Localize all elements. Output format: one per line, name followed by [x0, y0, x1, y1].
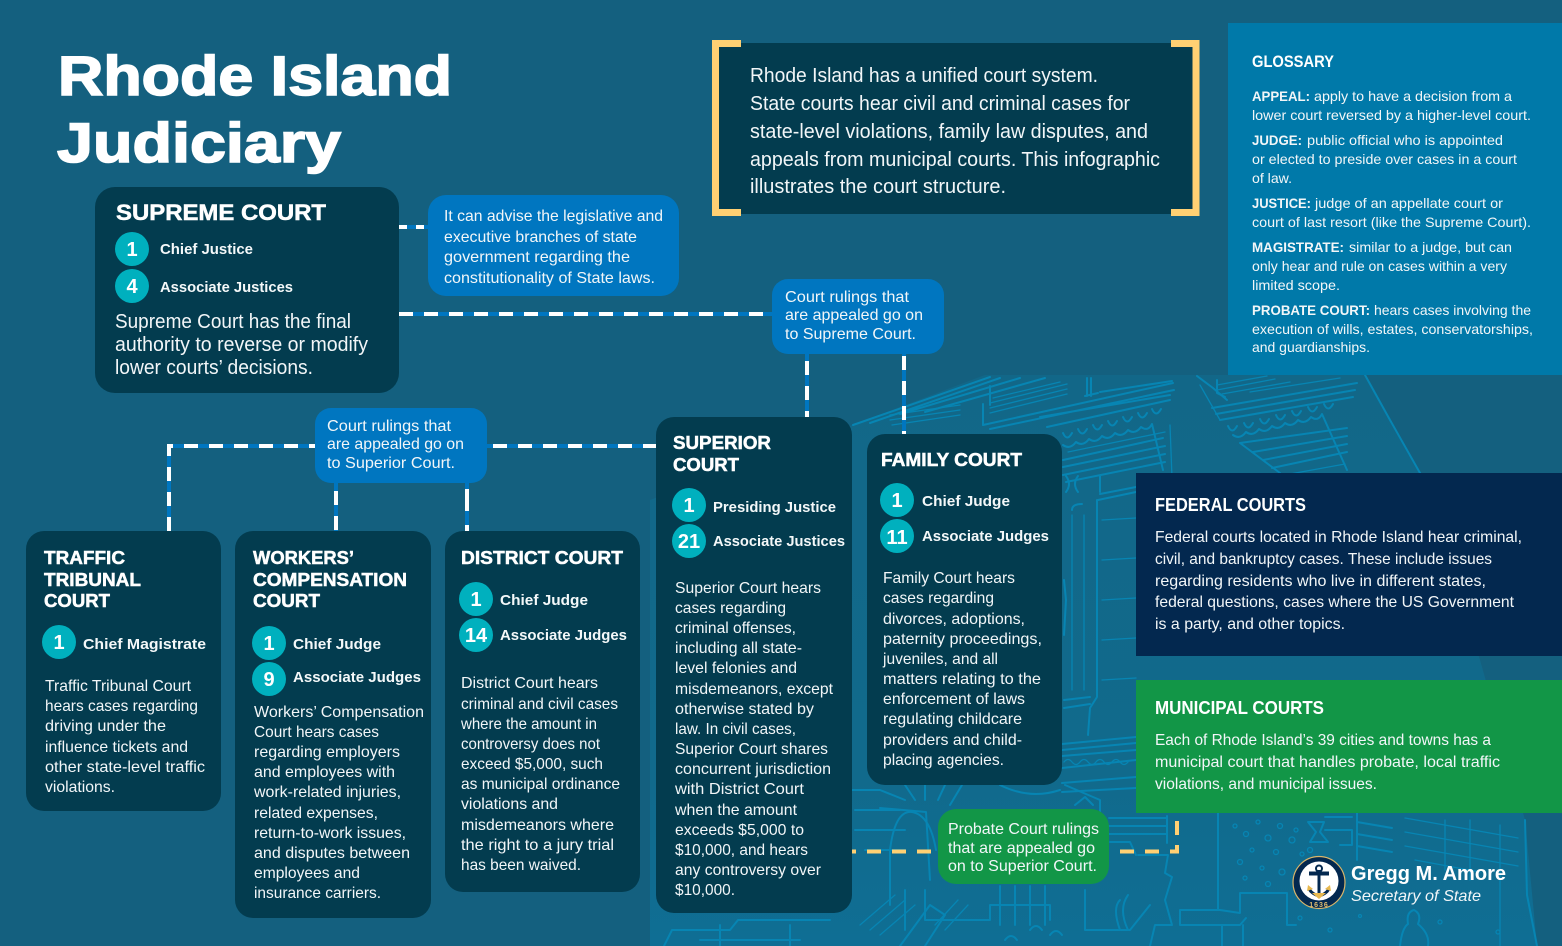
- glossary: magistrate: MAGISTRATE:: [1252, 239, 1344, 255]
- traffic tribunal description: other state-level traffic: [45, 759, 205, 776]
- badge: 1 chief judge: 1: [891, 490, 903, 512]
- workers' compensation description: related expenses,: [254, 805, 378, 822]
- callout: probate appeals: Probate Court rulings: [948, 821, 1099, 838]
- federal courts description: regarding residents who live in different states,: [1155, 573, 1486, 590]
- heading: glossary: GLOSSARY: [1252, 52, 1335, 71]
- heading: family court: FAMILY COURT: [881, 450, 1022, 470]
- workers' compensation description: and employees with: [254, 764, 395, 781]
- connector: appeals to supreme court: [399, 314, 904, 434]
- callout: appeals go to superior court: [315, 408, 487, 483]
- badge: 1 chief judge: 1: [470, 589, 482, 611]
- callout: appeals go to superior court: are appealed go on: [327, 436, 464, 453]
- badge: 1 chief judge: [880, 483, 1010, 517]
- badge: 11 associate judges: 11: [886, 527, 908, 549]
- badge: 1 chief magistrate: 1: [53, 632, 65, 654]
- district court description: exceed $5,000, such: [461, 756, 603, 773]
- connector: appeals to superior court: [169, 446, 656, 531]
- badge: 1 chief justice: [115, 232, 253, 266]
- superior court description: cases regarding: [675, 600, 786, 617]
- badge: 1 chief judge: Chief Judge: [293, 636, 381, 653]
- glossary: justice: judge of an appellate court or: [1314, 195, 1503, 211]
- title: Judiciary: [57, 111, 341, 174]
- glossary: probate court: [1252, 302, 1533, 355]
- heading: district court: DISTRICT COURT: [461, 548, 623, 568]
- district court description: misdemeanors where: [461, 817, 614, 834]
- badge: 1 presiding justice: 1: [683, 495, 695, 517]
- badge: 9 associate judges: Associate Judges: [293, 669, 421, 686]
- panel: traffic tribunal court: [26, 531, 221, 811]
- icon: state seal anchor: [1293, 856, 1345, 909]
- supreme court description: Supreme Court has the final: [115, 311, 351, 333]
- panel: glossary: [1228, 23, 1562, 375]
- badge: 1 chief magistrate: Chief Magistrate: [83, 636, 206, 653]
- traffic tribunal description: [45, 678, 205, 796]
- glossary: appeal: apply to have a decision from a: [1314, 88, 1512, 104]
- workers' compensation description: insurance carriers.: [254, 885, 381, 902]
- superior court description: criminal offenses,: [675, 620, 796, 637]
- badge: 14 associate judges: 14: [465, 625, 488, 647]
- district court description: where the amount in: [460, 716, 597, 733]
- glossary: judge: [1252, 132, 1517, 186]
- heading: traffic tribunal court: [44, 548, 141, 611]
- callout: advisory role: government regarding the: [444, 249, 630, 266]
- glossary: justice: court of last resort (like the Supreme Court).: [1252, 214, 1531, 230]
- workers' compensation description: Workers’ Compensation: [254, 704, 424, 721]
- callout: appeals go to superior court: Court rulings that: [327, 418, 452, 435]
- bracket: right: [1171, 44, 1196, 212]
- glossary: judge: or elected to preside over cases in a court: [1252, 151, 1517, 167]
- glossary: probate court: PROBATE COURT:: [1252, 302, 1370, 318]
- superior court description: Superior Court hears: [675, 580, 821, 597]
- badge: 1 chief judge: [252, 626, 381, 660]
- panel: federal courts: [1136, 473, 1562, 656]
- glossary: justice: [1252, 195, 1531, 230]
- traffic tribunal description: violations.: [45, 779, 115, 796]
- bracket: left: [716, 44, 741, 212]
- badge: 4 associate justices: 4: [126, 276, 138, 298]
- federal courts description: Federal courts located in Rhode Island hear criminal,: [1155, 529, 1522, 546]
- badge: 1 chief justice: 1: [126, 239, 138, 261]
- traffic tribunal description: influence tickets and: [45, 739, 188, 756]
- callout: probate appeals: [938, 809, 1109, 884]
- superior court description: with District Court: [674, 781, 805, 798]
- superior court description: concurrent jurisdiction: [675, 761, 831, 778]
- badge: 14 associate judges: Associate Judges: [500, 627, 627, 644]
- traffic tribunal description: Traffic Tribunal Court: [45, 678, 192, 695]
- badge: 21 associate justices: [672, 524, 845, 558]
- badge: 11 associate judges: Associate Judges: [922, 528, 1049, 545]
- glossary: magistrate: [1252, 239, 1512, 293]
- title: [57, 44, 452, 174]
- callout: advisory role: It can advise the legislative and: [444, 208, 663, 225]
- glossary: probate court: and guardianships.: [1252, 339, 1370, 355]
- callout: advisory role: [428, 195, 679, 296]
- introduction text: [750, 65, 1160, 198]
- family court description: providers and child-: [883, 732, 1022, 749]
- callout: appeals go to superior court: to Superior Court.: [327, 455, 455, 472]
- panel: introduction: [716, 43, 1196, 214]
- family court description: placing agencies.: [883, 752, 1004, 769]
- glossary: judge: of law.: [1252, 170, 1292, 186]
- callout: advisory role: executive branches of state: [444, 229, 637, 246]
- family court description: regulating childcare: [883, 711, 1022, 728]
- badge: 1 chief magistrate: [42, 625, 206, 659]
- glossary: judge: JUDGE:: [1252, 132, 1302, 148]
- heading: workers' compensation court: COURT: [253, 591, 320, 611]
- workers' compensation description: regarding employers: [254, 744, 400, 761]
- family court description: juveniles, and all: [882, 651, 998, 668]
- introduction text: State courts hear civil and criminal cases for: [750, 93, 1130, 115]
- callout: advisory role: constitutionality of State laws.: [444, 270, 655, 287]
- heading: workers' compensation court: COMPENSATION: [253, 570, 407, 590]
- glossary: appeal: [1252, 88, 1531, 123]
- glossary: appeal: lower court reversed by a higher-level court.: [1252, 107, 1531, 123]
- callout: probate appeals: that are appealed go: [948, 840, 1095, 857]
- superior court description: otherwise stated by: [675, 701, 814, 718]
- glossary: magistrate: similar to a judge, but can: [1349, 239, 1512, 255]
- supreme court description: [115, 311, 368, 379]
- superior court description: $10,000, and hears: [675, 842, 808, 859]
- district court description: criminal and civil cases: [461, 696, 618, 713]
- heading: traffic tribunal court: TRAFFIC: [44, 548, 125, 568]
- badge: 1 chief judge: Chief Judge: [500, 592, 588, 609]
- superior court description: Superior Court shares: [675, 741, 828, 758]
- introduction text: illustrates the court structure.: [750, 176, 1006, 198]
- heading: superior court: COURT: [673, 455, 739, 475]
- introduction text: Rhode Island has a unified court system.: [750, 65, 1098, 87]
- traffic tribunal description: driving under the: [45, 718, 166, 735]
- district court description: District Court hears: [461, 675, 598, 692]
- district court description: controversy does not: [461, 736, 601, 753]
- connector: probate appeals to superior court: [852, 821, 1179, 853]
- cornice, left wing: [853, 375, 1424, 482]
- family court description: enforcement of laws: [883, 691, 1025, 708]
- glossary: magistrate: only hear and rule on cases within a very: [1252, 258, 1507, 274]
- badge: 9 associate judges: [252, 662, 421, 696]
- callout: appeals go to supreme court: [772, 279, 944, 354]
- panel: superior court: [656, 417, 852, 913]
- lower facade: [852, 785, 1537, 946]
- family court description: paternity proceedings,: [883, 631, 1042, 648]
- background: courthouse line art: [650, 375, 1537, 946]
- badge: 1 chief judge: [459, 582, 588, 616]
- superior court description: [674, 580, 834, 899]
- workers' compensation description: Court hears cases: [254, 724, 379, 741]
- badge: 4 associate justices: Associate Justices: [160, 279, 293, 296]
- district court description: violations and: [461, 796, 558, 813]
- workers' compensation description: and disputes between: [254, 845, 410, 862]
- badge: 21 associate justices: Associate Justices: [713, 533, 845, 550]
- badge: 21 associate justices: 21: [678, 531, 700, 553]
- municipal courts description: Each of Rhode Island’s 39 cities and towns has a: [1155, 732, 1491, 749]
- superior court description: when the amount: [674, 802, 798, 819]
- superior court description: misdemeanors, except: [675, 681, 834, 698]
- superior court description: exceeds $5,000 to: [675, 822, 804, 839]
- municipal courts description: violations, and municipal issues.: [1155, 776, 1377, 793]
- workers' compensation description: return-to-work issues,: [254, 825, 406, 842]
- heading: superior court: [673, 433, 771, 475]
- superior court description: $10,000.: [675, 882, 735, 899]
- panel: workers' compensation court: [235, 531, 431, 918]
- badge: 1 chief judge: Chief Judge: [922, 493, 1010, 510]
- workers' compensation description: [253, 704, 424, 902]
- glossary: justice: JUSTICE:: [1252, 195, 1311, 211]
- panel: municipal courts: [1136, 680, 1562, 813]
- superior court description: level felonies and: [675, 660, 797, 677]
- introduction text: appeals from municipal courts. This infographic: [750, 149, 1160, 171]
- heading: municipal courts: MUNICIPAL COURTS: [1155, 698, 1324, 718]
- badge: 1 chief justice: Chief Justice: [160, 241, 253, 258]
- glossary: probate court: hears cases involving the: [1374, 302, 1531, 318]
- superior court description: law. In civil cases,: [675, 721, 796, 738]
- panel: family court: [867, 434, 1062, 785]
- badge: 1 presiding justice: [672, 488, 836, 522]
- municipal courts description: [1155, 732, 1500, 793]
- family court description: Family Court hears: [883, 570, 1015, 587]
- introduction text: state-level violations, family law disputes, and: [750, 121, 1148, 143]
- family court description: [882, 570, 1042, 769]
- callout: appeals go to supreme court: Court rulings that: [785, 289, 910, 306]
- federal courts description: federal questions, cases where the US Government: [1155, 594, 1515, 611]
- glossary: appeal: APPEAL:: [1252, 88, 1310, 104]
- heading: federal courts: FEDERAL COURTS: [1155, 495, 1306, 515]
- heading: traffic tribunal court: TRIBUNAL: [44, 570, 141, 590]
- callout: appeals go to supreme court: to Supreme Court.: [785, 326, 916, 343]
- district court description: the right to a jury trial: [461, 837, 614, 854]
- icon: state seal anchor: 1636: [1309, 902, 1329, 909]
- workers' compensation description: employees and: [254, 865, 360, 882]
- heading: traffic tribunal court: COURT: [44, 591, 110, 611]
- panel: district court: [445, 531, 640, 892]
- supreme court description: lower courts’ decisions.: [115, 357, 313, 379]
- heading: supreme court: SUPREME COURT: [116, 200, 327, 225]
- secretary of state signature: [1351, 863, 1506, 905]
- traffic tribunal description: hears cases regarding: [45, 698, 198, 715]
- heading: superior court: SUPERIOR: [673, 433, 771, 453]
- column between family and federal panels: [1062, 476, 1136, 805]
- badge: 4 associate justices: [115, 269, 293, 303]
- federal courts description: civil, and bankruptcy cases. These include issues: [1155, 551, 1492, 568]
- glossary: magistrate: limited scope.: [1252, 277, 1340, 293]
- workers' compensation description: work-related injuries,: [253, 784, 401, 801]
- heading: workers' compensation court: [253, 548, 407, 611]
- district court description: has been waived.: [461, 857, 581, 874]
- heading: workers' compensation court: WORKERS’: [253, 548, 354, 568]
- family court description: divorces, adoptions,: [883, 611, 1025, 628]
- badge: 1 presiding justice: Presiding Justice: [713, 499, 836, 516]
- connector: supreme court to advisory note: [399, 225, 428, 229]
- federal courts description: is a party, and other topics.: [1155, 616, 1345, 633]
- district court description: [460, 675, 620, 874]
- federal courts description: [1155, 529, 1522, 633]
- district court description: as municipal ordinance: [461, 776, 620, 793]
- glossary: probate court: execution of wills, estates, conservatorships,: [1252, 321, 1533, 337]
- badge: 1 chief judge: 1: [263, 633, 275, 655]
- glossary: judge: public official who is appointed: [1307, 132, 1503, 148]
- secretary of state signature: Gregg M. Amore: [1351, 863, 1506, 885]
- title: Rhode Island: [58, 44, 452, 107]
- callout: probate appeals: on to Superior Court.: [948, 858, 1097, 875]
- callout: appeals go to supreme court: are appealed go on: [785, 307, 923, 324]
- panel: supreme court: [95, 187, 399, 393]
- family court description: matters relating to the: [883, 671, 1041, 688]
- supreme court description: authority to reverse or modify: [115, 334, 368, 356]
- badge: 9 associate judges: 9: [263, 669, 275, 691]
- badge: 11 associate judges: [880, 519, 1049, 553]
- family court description: cases regarding: [883, 590, 994, 607]
- badge: 14 associate judges: [459, 618, 627, 652]
- secretary of state signature: Secretary of State: [1351, 888, 1481, 905]
- municipal courts description: municipal court that handles probate, local traffic: [1155, 754, 1500, 771]
- superior court description: including all state-: [675, 640, 802, 657]
- superior court description: any controversy over: [675, 862, 822, 879]
